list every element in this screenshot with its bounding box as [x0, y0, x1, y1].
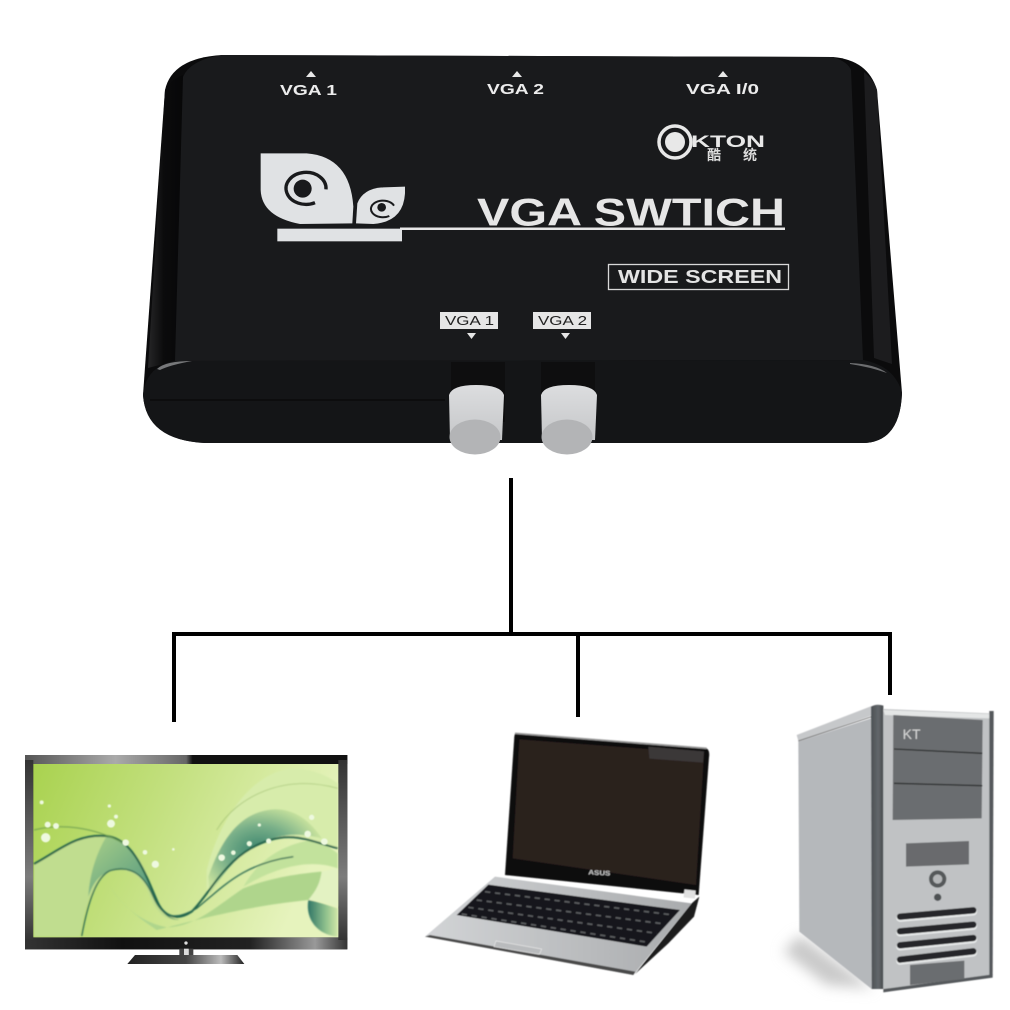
- VGA switch device: [143, 55, 902, 454]
- tower side panel: [797, 706, 872, 989]
- monitor screen with green waves: [33, 764, 338, 937]
- push button 2: [541, 385, 597, 454]
- device body: [143, 55, 902, 443]
- button label: VGA 2: VGA 2: [538, 313, 587, 328]
- button label: VGA 1: [440, 312, 498, 339]
- device front face: [143, 360, 902, 443]
- laptop touchpad: [494, 941, 542, 954]
- tower drive bays: KT: [903, 726, 921, 742]
- tower ground shadow: [783, 935, 873, 988]
- brand logo: OKTON: KTON: [691, 132, 765, 151]
- front seam: [150, 399, 445, 401]
- port label: VGA 1: VGA 1: [280, 82, 337, 99]
- push button 1: [449, 385, 504, 454]
- port label: VGA I/0: VGA I/0: [686, 81, 759, 98]
- title: VGA SWTICH: VGA SWTICH: [477, 192, 785, 234]
- left corner highlight: [157, 361, 192, 370]
- monitor bezel: [25, 755, 347, 949]
- port label: VGA 2: VGA 2: [487, 81, 544, 98]
- connection lines: [172, 478, 892, 722]
- laptop keyboard: [457, 885, 680, 947]
- tower display panel: [906, 841, 969, 867]
- tower drive bays: [893, 715, 983, 820]
- clipped to the screen by staying inside its bounds: [207, 768, 338, 890]
- button label: VGA 1: VGA 1: [445, 313, 494, 328]
- sparkles: [40, 800, 328, 868]
- brand logo: OKTON: 统: [743, 147, 757, 163]
- computer tower: [783, 705, 994, 992]
- brand logo: OKTON: 酷: [707, 147, 721, 163]
- tower vents: [900, 910, 973, 961]
- monitor: [25, 755, 347, 964]
- port label: VGA I/0: [686, 71, 759, 98]
- brand logo: OKTON: [659, 126, 765, 163]
- tower front panel: [871, 705, 994, 992]
- port label: VGA 1: [280, 71, 337, 99]
- laptop base: [425, 877, 699, 975]
- device right side gloss: [864, 72, 892, 364]
- tower power button: [929, 870, 946, 901]
- monitor stand: [127, 949, 244, 964]
- port label: VGA 2: [487, 71, 544, 98]
- button recesses: [451, 362, 595, 422]
- device left side gloss: [148, 75, 183, 368]
- leaf logo icon: [261, 153, 405, 241]
- right corner highlight: [850, 363, 887, 373]
- badge: WIDE SCREEN: WIDE SCREEN: [618, 267, 782, 287]
- laptop lid: [505, 733, 709, 895]
- device top surface: [175, 55, 863, 361]
- ASUS logo: ASUS: [588, 869, 611, 878]
- button label: VGA 2: [533, 312, 591, 339]
- laptop: [425, 733, 709, 975]
- tower bottom panel: [910, 961, 964, 985]
- badge: WIDE SCREEN: [608, 264, 788, 290]
